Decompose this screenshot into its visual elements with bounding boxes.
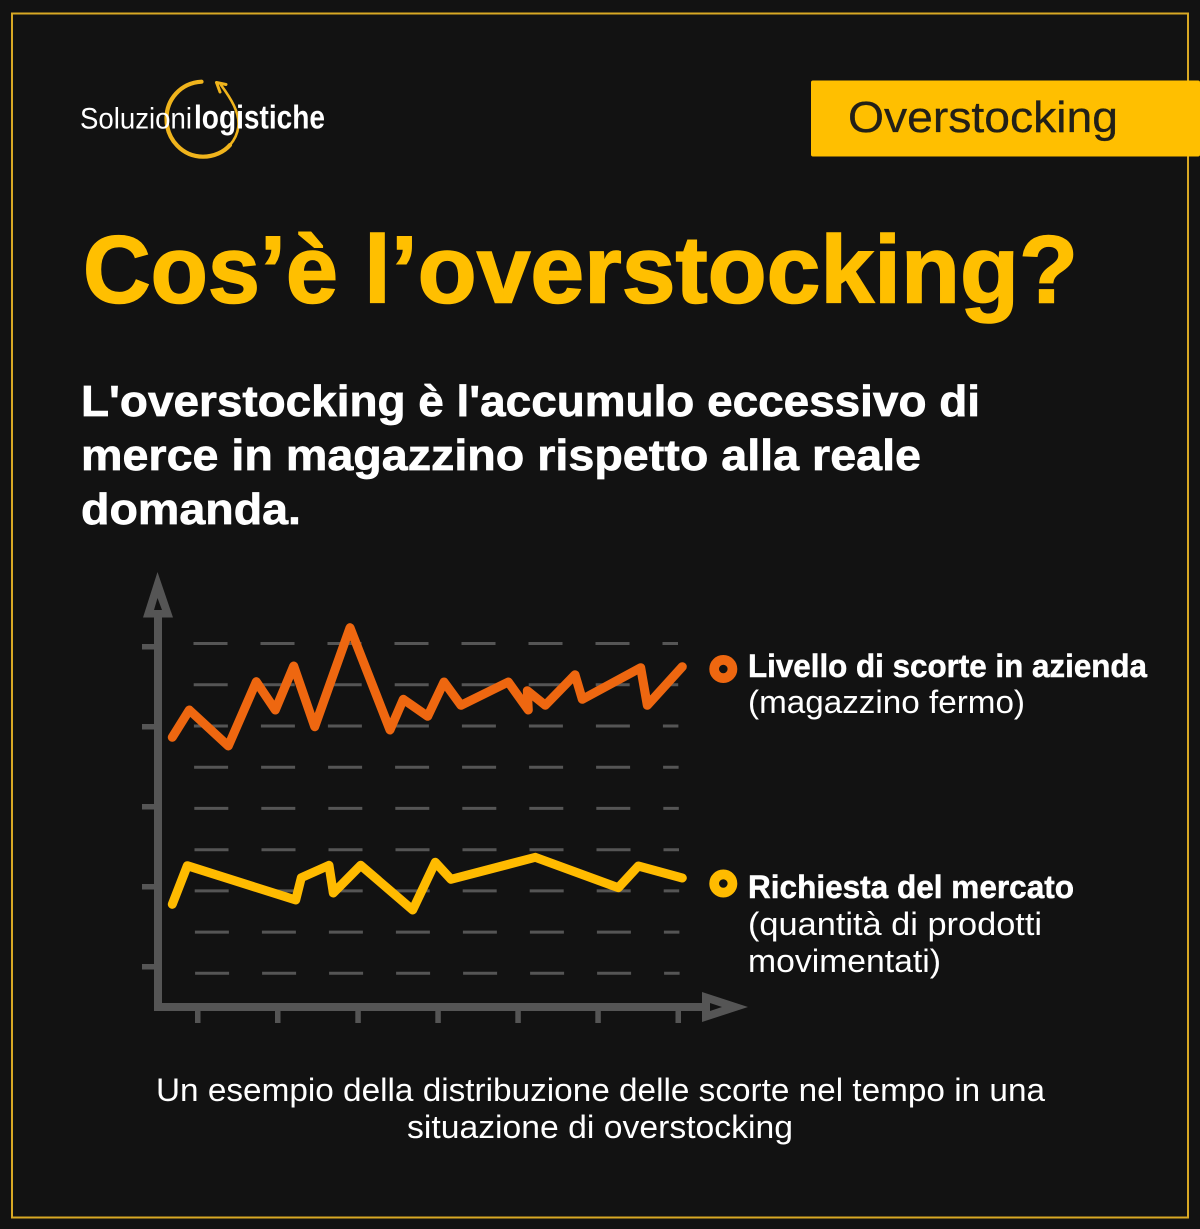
legend: stock level [714,648,1147,720]
line chart [142,572,748,1023]
caption: Un esempio della distribuzione delle scorte nel tempo in una [156,1072,1045,1108]
legend: market demand: movimentati) [748,943,941,979]
legend: stock level: (magazzino fermo) [748,684,1025,720]
tag: Overstocking: Overstocking [848,93,1118,142]
tag: Overstocking [811,80,1200,156]
title: l’overstocking? [364,216,1078,324]
intro text: L'overstocking è l'accumulo eccessivo di [81,377,980,426]
series: market demand [172,857,682,910]
caption [156,1072,1045,1145]
logo: Soluzioni [80,102,192,136]
intro text [81,377,980,534]
logo: logistiche [194,98,325,136]
logo [80,82,325,157]
legend: stock level: Livello di scorte in azienda [748,648,1147,684]
intro text: merce in magazzino rispetto alla reale [81,431,921,480]
series: stock level [172,628,682,746]
axes [142,572,748,1023]
legend: market demand: (quantità di prodotti [748,906,1042,942]
caption: situazione di overstocking [407,1109,793,1145]
title: Cos’è [83,216,338,324]
intro text: domanda. [81,485,301,534]
legend: market demand [714,869,1074,979]
legend: market demand: Richiesta del mercato [748,869,1074,905]
